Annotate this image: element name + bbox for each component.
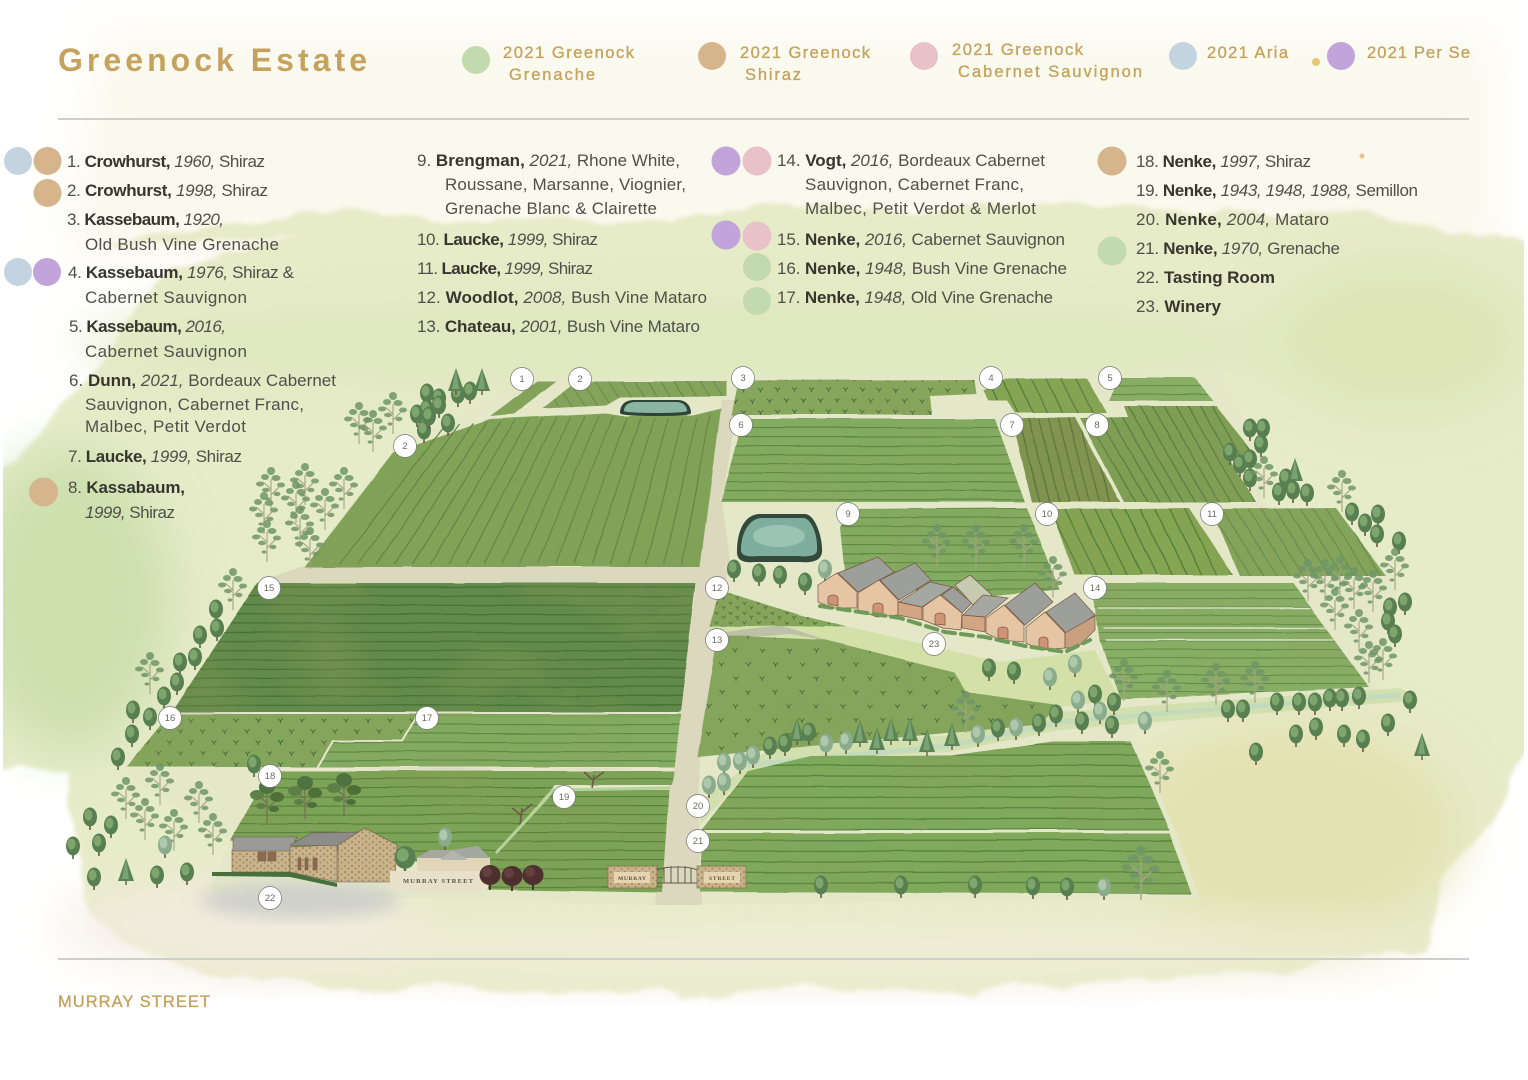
marker 23: [922, 632, 946, 656]
Murray Street sign wall: MURRAY STREET: [403, 878, 474, 885]
legend: Greenock Grenache: 2021 Greenock: [503, 44, 635, 62]
marker 22: 22: [265, 893, 275, 904]
vineyard list column 3: [712, 146, 1067, 315]
marker 17: [416, 706, 438, 730]
item 5: [69, 317, 247, 361]
marker 10: 10: [1042, 509, 1052, 520]
block 12: [710, 590, 847, 627]
footer label: MURRAY STREET: [58, 993, 210, 1011]
vineyard blocks: [127, 378, 1386, 894]
item 6: 6. Dunn, 2021, Bordeaux Cabernet: [69, 371, 336, 390]
large block 2: [305, 408, 721, 567]
item 14: 14. Vogt, 2016, Bordeaux Cabernet: [777, 151, 1045, 170]
marker 13: 13: [712, 635, 722, 646]
block 16: [127, 714, 680, 767]
marker 20: [686, 794, 710, 818]
block 21: [700, 833, 1192, 894]
block 14: [1092, 583, 1369, 700]
item 6: [69, 371, 336, 436]
marker 1: [510, 368, 534, 390]
marker 23: 23: [929, 639, 939, 650]
marker 19: 19: [559, 792, 569, 803]
item 8: 8. Kassabaum,: [68, 478, 185, 497]
ground and roads: [120, 374, 1420, 918]
block 2 top: [543, 381, 726, 408]
marker 19: [552, 786, 576, 808]
tasting room: [212, 828, 397, 887]
block 7: [1012, 417, 1120, 502]
item 9: Roussane, Marsanne, Viognier,: [445, 175, 686, 194]
legend: Aria: 2021 Aria: [1207, 44, 1289, 62]
item 11: 11. Laucke, 1999, Shiraz: [417, 259, 593, 278]
marker 11: 11: [1207, 509, 1217, 520]
item 4: Cabernet Sauvignon: [85, 288, 247, 307]
vineyard list column 1: [4, 147, 336, 522]
large dam: [737, 514, 822, 562]
metal roof: [955, 575, 992, 605]
legend: Greenock Shiraz: Shiraz: [745, 66, 801, 84]
block 6: [721, 419, 1025, 502]
shed 5: [1026, 593, 1095, 650]
item 17: 17. Nenke, 1948, Old Vine Grenache: [777, 288, 1053, 307]
shed 4: [986, 583, 1053, 642]
marker 7: [1000, 414, 1024, 436]
marker 9: 9: [845, 509, 851, 520]
marker 6: [730, 414, 752, 436]
marker 2 lower: 2: [402, 441, 408, 452]
item 3: 3. Kassebaum, 1920,: [67, 210, 224, 229]
block colour dots: [712, 146, 772, 315]
marker 20: 20: [693, 801, 703, 812]
marker 11: [1200, 502, 1224, 526]
block 18: [230, 771, 674, 870]
marker 14: [1084, 576, 1106, 600]
item 4: 4. Kassebaum, 1976, Shiraz &: [68, 263, 295, 282]
block colour dots: [4, 147, 62, 506]
Murray Street sign wall: [390, 871, 486, 890]
marker 10: [1036, 502, 1058, 526]
item 14: Malbec, Petit Verdot & Merlot: [805, 199, 1036, 218]
legend: Greenock Cabernet Sauvignon: Cabernet Sauvignon: [958, 63, 1142, 81]
item 14: [777, 151, 1045, 218]
block 17: [317, 716, 680, 767]
legend: Greenock Cabernet Sauvignon: [910, 41, 1142, 81]
block 4: [983, 378, 1107, 413]
block 20: [702, 741, 1170, 830]
marker 21: 21: [693, 836, 703, 847]
vineyard list column 2: [417, 151, 707, 336]
marker 7: 7: [1009, 420, 1015, 431]
vineyard list column 4: [1098, 146, 1418, 316]
marker 16: 16: [165, 713, 175, 724]
small dam: [620, 400, 691, 416]
item 9: Grenache Blanc & Clairette: [445, 199, 657, 218]
block 3: [731, 380, 976, 415]
block 11: [1211, 508, 1386, 576]
item 6: Malbec, Petit Verdot: [85, 417, 246, 436]
item 21: 21. Nenke, 1970, Grenache: [1136, 239, 1340, 258]
block colour dots: [1098, 146, 1126, 266]
marker 12: 12: [712, 583, 722, 594]
block 8: [1080, 406, 1256, 502]
marker 15: 15: [264, 583, 274, 594]
item 22: 22. Tasting Room: [1136, 268, 1275, 287]
entrance gates: STREET: [709, 876, 735, 882]
winery buildings: [818, 557, 1095, 650]
item 6: Sauvignon, Cabernet Franc,: [85, 395, 304, 414]
marker 13: [706, 628, 728, 652]
marker 1: 1: [519, 374, 525, 385]
item 2: 2. Crowhurst, 1998, Shiraz: [67, 181, 268, 200]
marker 2: 2: [577, 374, 583, 385]
item 19: 19. Nenke, 1943, 1948, 1988, Semillon: [1136, 181, 1418, 200]
marker 6: 6: [738, 420, 744, 431]
legend: Aria: [1169, 42, 1289, 70]
block 13: [697, 635, 1058, 757]
item 14: Sauvignon, Cabernet Franc,: [805, 175, 1024, 194]
legend: Greenock Grenache: [462, 44, 635, 84]
estate map: [66, 366, 1430, 918]
marker 2 lower: [394, 434, 416, 458]
item 9: 9. Brengman, 2021, Rhone White,: [417, 151, 680, 170]
item 9: [417, 151, 686, 218]
item 10: 10. Laucke, 1999, Shiraz: [417, 230, 598, 249]
shed 1: [818, 557, 894, 608]
colour legend: [462, 41, 1470, 84]
marker 3: [732, 366, 754, 390]
marker 5: [1098, 366, 1122, 390]
trees: [66, 368, 1430, 900]
marker 9: [836, 502, 860, 526]
marker 22: [258, 886, 282, 910]
low section 1: [898, 582, 952, 620]
marker 14: 14: [1090, 583, 1100, 594]
legend: Greenock Shiraz: 2021 Greenock: [740, 44, 871, 62]
legend: Greenock Grenache: Grenache: [509, 66, 595, 84]
item 8: [68, 478, 185, 522]
block 9: [840, 508, 1060, 600]
item 5: Cabernet Sauvignon: [85, 342, 247, 361]
block 10: [1051, 508, 1233, 575]
item 3: [67, 210, 279, 254]
item 8: 1999, Shiraz: [85, 503, 175, 522]
shed 2: [858, 563, 931, 617]
legend: Per Se: 2021 Per Se: [1367, 44, 1470, 62]
marker 2: [568, 368, 592, 390]
item 5: 5. Kassebaum, 2016,: [69, 317, 226, 336]
marker 18: [258, 764, 282, 788]
entrance gates: [608, 866, 746, 888]
block 5: [1109, 378, 1213, 401]
legend: Greenock Cabernet Sauvignon: 2021 Greenock: [952, 41, 1084, 59]
marker 8: 8: [1094, 420, 1100, 431]
marker 4: [980, 366, 1002, 390]
item 12: 12. Woodlot, 2008, Bush Vine Mataro: [417, 288, 707, 307]
header title: Greenock Estate: [58, 42, 367, 78]
homestead: [394, 828, 490, 873]
block 15: [172, 583, 696, 712]
marker 18: 18: [265, 771, 275, 782]
item 15: 15. Nenke, 2016, Cabernet Sauvignon: [777, 230, 1065, 249]
legend: Greenock Shiraz: [698, 42, 871, 84]
item 7: 7. Laucke, 1999, Shiraz: [68, 447, 242, 466]
marker 17: 17: [422, 713, 432, 724]
block 1: [490, 381, 557, 416]
marker 8: [1086, 414, 1108, 436]
marker 4: 4: [988, 373, 994, 384]
marker 3: 3: [740, 373, 746, 384]
entrance gates: MURRAY: [618, 876, 646, 882]
item 3: Old Bush Vine Grenache: [85, 235, 279, 254]
marker 12: [706, 576, 728, 600]
item 16: 16. Nenke, 1948, Bush Vine Grenache: [777, 259, 1067, 278]
numbered map markers: [158, 366, 1224, 910]
shed 3: [923, 587, 972, 630]
winery hedge: [820, 606, 1090, 652]
block 19: [487, 790, 669, 892]
marker 5: 5: [1107, 373, 1113, 384]
red feature trees: [480, 865, 544, 891]
item 18: 18. Nenke, 1997, Shiraz: [1136, 152, 1311, 171]
marker 15: [258, 576, 280, 600]
low section 2: [962, 595, 1008, 632]
item 20: 20. Nenke, 2004, Mataro: [1136, 210, 1329, 229]
item 4: [68, 263, 295, 307]
legend: Per Se: [1327, 42, 1470, 70]
marker 21: [686, 830, 710, 852]
item 1: 1. Crowhurst, 1960, Shiraz: [67, 152, 265, 171]
marker 16: [158, 706, 182, 730]
item 13: 13. Chateau, 2001, Bush Vine Mataro: [417, 317, 700, 336]
item 23: 23. Winery: [1136, 297, 1222, 316]
